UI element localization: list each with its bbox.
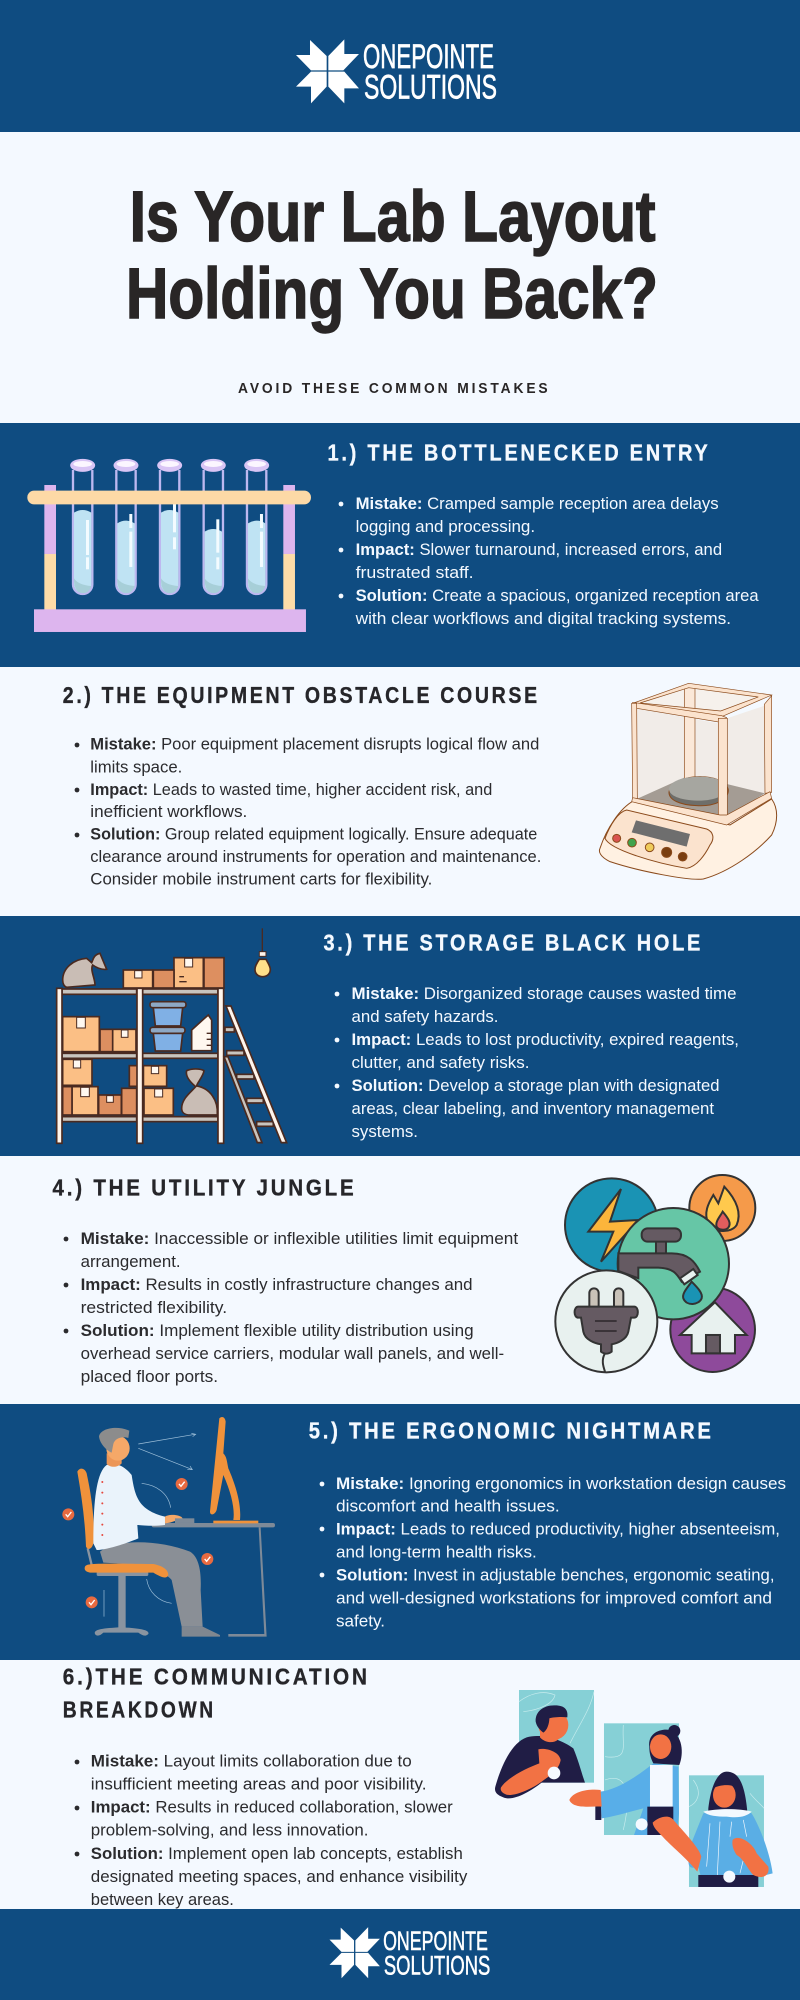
bullet list: overhead service carriers, modular wall panels, and well- bbox=[81, 1345, 504, 1363]
logo: OnePointe Solutions bbox=[296, 38, 497, 106]
panel: 6 the communication breakdown bbox=[0, 1660, 800, 1909]
bullet list: Mistake: Poor equipment placement disrupts logical flow and bbox=[90, 736, 539, 754]
bullet list: Solution: Implement flexible utility distribution using bbox=[81, 1322, 474, 1340]
bullet list: designated meeting spaces, and enhance visibility bbox=[91, 1868, 468, 1886]
bullet list bbox=[75, 736, 541, 888]
panel: 4 the utility jungle bbox=[0, 1156, 800, 1404]
bullet list: Impact: Leads to wasted time, higher accident risk, and bbox=[90, 781, 492, 799]
logo: OnePointe Solutions: SOLUTIONS bbox=[364, 68, 497, 106]
bullet list: clutter, and safety risks. bbox=[352, 1054, 530, 1072]
icon: light bulb bbox=[255, 928, 270, 977]
heading: 6.)THE COMMUNICATION bbox=[63, 1664, 370, 1690]
bullet list bbox=[320, 1475, 786, 1630]
bullet list: between key areas. bbox=[91, 1891, 234, 1909]
bullet list: areas, clear labeling, and inventory management bbox=[352, 1100, 714, 1118]
heading bbox=[63, 1664, 370, 1722]
bullet list: clearance around instruments for operation and maintenance. bbox=[90, 848, 541, 866]
heading: 4.) THE UTILITY JUNGLE bbox=[52, 1174, 356, 1200]
icon: quilt star bbox=[296, 39, 359, 103]
logo: OnePointe Solutions: ONEPOINTE bbox=[383, 1925, 488, 1956]
header band with logo bbox=[0, 0, 800, 132]
heading: 3.) THE STORAGE BLACK HOLE bbox=[324, 930, 703, 956]
heading: 5.) THE ERGONOMIC NIGHTMARE bbox=[309, 1418, 714, 1444]
bullet list: Impact: Results in reduced collaboration, slower bbox=[91, 1798, 453, 1816]
logo: OnePointe Solutions: ONEPOINTE bbox=[363, 38, 494, 76]
title: Is Your Lab Layout bbox=[130, 178, 656, 257]
person one bbox=[495, 1705, 585, 1798]
bullet list bbox=[64, 1230, 519, 1386]
bullet list: and long-term health risks. bbox=[336, 1544, 537, 1562]
test tubes bbox=[71, 459, 269, 594]
bullet list: problem-solving, and less innovation. bbox=[91, 1822, 368, 1840]
bullet list: safety. bbox=[336, 1612, 385, 1630]
bullet list bbox=[75, 1752, 468, 1909]
bullet list: Solution: Group related equipment logically. Ensure adequate bbox=[90, 826, 537, 844]
bullet list: Mistake: Disorganized storage causes wasted time bbox=[352, 985, 736, 1003]
sack bbox=[63, 953, 107, 987]
blue tubs bbox=[150, 1002, 186, 1051]
bullet list: insufficient meeting areas and poor visibility. bbox=[91, 1776, 427, 1794]
footer band with logo bbox=[0, 1909, 800, 2000]
icon: quilt star bbox=[329, 1927, 380, 1978]
heading: BREAKDOWN bbox=[63, 1696, 216, 1722]
bullet list bbox=[339, 495, 759, 628]
person bbox=[85, 1428, 220, 1637]
icon: faucet bbox=[618, 1228, 702, 1304]
bullet list: discomfort and health issues. bbox=[336, 1498, 560, 1516]
bullet list: Impact: Leads to reduced productivity, higher absenteeism, bbox=[336, 1520, 780, 1538]
icon: lightning bolt bbox=[588, 1189, 638, 1262]
bullet list: placed floor ports. bbox=[81, 1368, 218, 1386]
icon: plug bbox=[575, 1288, 638, 1372]
bullet list: Solution: Implement open lab concepts, establish bbox=[91, 1845, 463, 1863]
ladder bbox=[224, 1006, 287, 1143]
bullet list: and safety hazards. bbox=[352, 1008, 498, 1026]
illustration: test tube rack bbox=[27, 459, 311, 632]
illustration: three colleagues bbox=[495, 1690, 773, 1887]
bullet list: Mistake: Cramped sample reception area delays bbox=[356, 495, 719, 513]
bullet list: Impact: Results in costly infrastructure changes and bbox=[81, 1276, 473, 1294]
bullet list: arrangement. bbox=[81, 1253, 181, 1271]
bullet list: and well-designed workstations for improved comfort and bbox=[336, 1590, 772, 1608]
bullet list: inefficient workflows. bbox=[90, 803, 247, 821]
bullet list: Consider mobile instrument carts for flexibility. bbox=[90, 870, 432, 888]
bullet list: Solution: Create a spacious, organized reception area bbox=[356, 587, 759, 605]
chair bbox=[77, 1469, 149, 1636]
bullet list bbox=[335, 985, 739, 1141]
icon: flame bbox=[706, 1187, 739, 1231]
bullet list: Impact: Slower turnaround, increased errors, and bbox=[356, 541, 722, 559]
monitor bbox=[210, 1417, 258, 1523]
panel: 1 the bottlenecked entry bbox=[0, 423, 800, 667]
bullet list: Mistake: Ignoring ergonomics in workstation design causes bbox=[336, 1475, 786, 1493]
bottle bbox=[192, 1015, 212, 1051]
bullet list: logging and processing. bbox=[356, 518, 535, 536]
person three bbox=[653, 1772, 773, 1887]
illustration: storage shelves bbox=[57, 928, 287, 1143]
bullet list: limits space. bbox=[90, 758, 182, 776]
title: Holding You Back? bbox=[126, 255, 658, 334]
panel: 5 the ergonomic nightmare bbox=[0, 1404, 800, 1660]
bullet list: systems. bbox=[352, 1123, 418, 1141]
check badges bbox=[62, 1478, 213, 1608]
illustration: utilities icons bbox=[555, 1175, 755, 1372]
bullet list: Mistake: Inaccessible or inflexible utilities limit equipment bbox=[81, 1230, 519, 1248]
sight lines and angle arrows bbox=[104, 1433, 196, 1617]
bullet list: Solution: Develop a storage plan with designated bbox=[352, 1077, 720, 1095]
heading: 2.) THE EQUIPMENT OBSTACLE COURSE bbox=[63, 682, 540, 708]
illustration: analytical balance bbox=[599, 683, 777, 879]
title bbox=[126, 178, 658, 334]
logo: OnePointe Solutions: SOLUTIONS bbox=[384, 1949, 490, 1980]
bullet list: restricted flexibility. bbox=[81, 1299, 227, 1317]
bullet list: Mistake: Layout limits collaboration due to bbox=[91, 1752, 412, 1770]
bullet list: Solution: Invest in adjustable benches, ergonomic seating, bbox=[336, 1566, 774, 1584]
panel: 2 the equipment obstacle course bbox=[0, 667, 800, 916]
icon: house bbox=[680, 1302, 747, 1353]
subtitle: AVOID THESE COMMON MISTAKES bbox=[238, 381, 550, 397]
heading: 1.) THE BOTTLENECKED ENTRY bbox=[328, 440, 710, 466]
illustration: ergonomic workstation bbox=[62, 1417, 275, 1637]
bullet list: Impact: Leads to lost productivity, expired reagents, bbox=[352, 1031, 739, 1049]
person two bbox=[569, 1725, 682, 1835]
bullet list: frustrated staff. bbox=[356, 564, 474, 582]
desk bbox=[152, 1523, 275, 1637]
bullet list: with clear workflows and digital tracking systems. bbox=[355, 610, 731, 628]
panel: 3 the storage black hole bbox=[0, 916, 800, 1156]
logo: OnePointe Solutions bbox=[329, 1925, 490, 1980]
